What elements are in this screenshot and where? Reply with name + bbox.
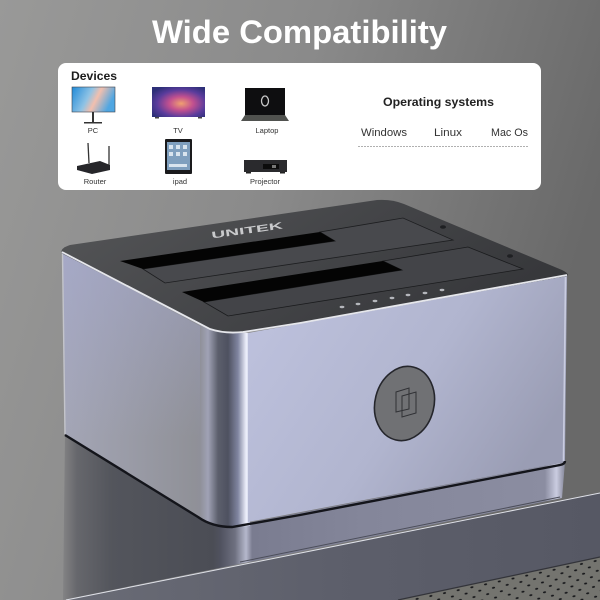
icon: router [77,143,110,174]
icon: projector [244,160,287,174]
icon: TV [152,87,205,118]
slot 1 [120,232,335,269]
floor reflection of device [63,435,565,600]
icon: laptop [241,88,289,121]
label: router: Router [84,177,107,186]
silver top edge [62,252,567,333]
title: Wide Compatibility [152,14,447,50]
perforated mesh surface [398,557,600,600]
clone button [367,360,442,447]
label: TV: TV [173,126,183,135]
UNITEK logo: UNITEK [211,220,284,241]
eject holes [440,225,513,258]
label: projector: Projector [250,177,281,186]
panel background [58,63,541,190]
right rim highlight [564,277,566,461]
icon: PC monitor [72,87,115,124]
OS: Mac Os: Mac Os [491,127,528,139]
left rim highlight [62,254,65,434]
base shadow line [65,435,565,527]
label: ipad: ipad [173,177,187,186]
tray 1 [143,218,453,283]
OS: Linux: Linux [434,127,463,139]
label: PC: PC [88,126,99,135]
status LEDs [340,289,444,308]
OS: Windows: Windows [361,127,408,139]
devices heading: Devices [71,69,117,83]
docking station device [62,200,568,527]
compatibility panel [58,63,541,190]
label: laptop: Laptop [256,126,278,135]
top face [62,200,568,333]
tray 2 [204,247,523,316]
left side face [62,252,250,527]
shelf edge [62,493,600,600]
icon: iPad [165,139,192,174]
front side face [248,276,567,522]
slot 2 [182,261,402,302]
left face lavender shading [62,252,200,517]
operating systems heading: Operating systems [383,95,494,109]
